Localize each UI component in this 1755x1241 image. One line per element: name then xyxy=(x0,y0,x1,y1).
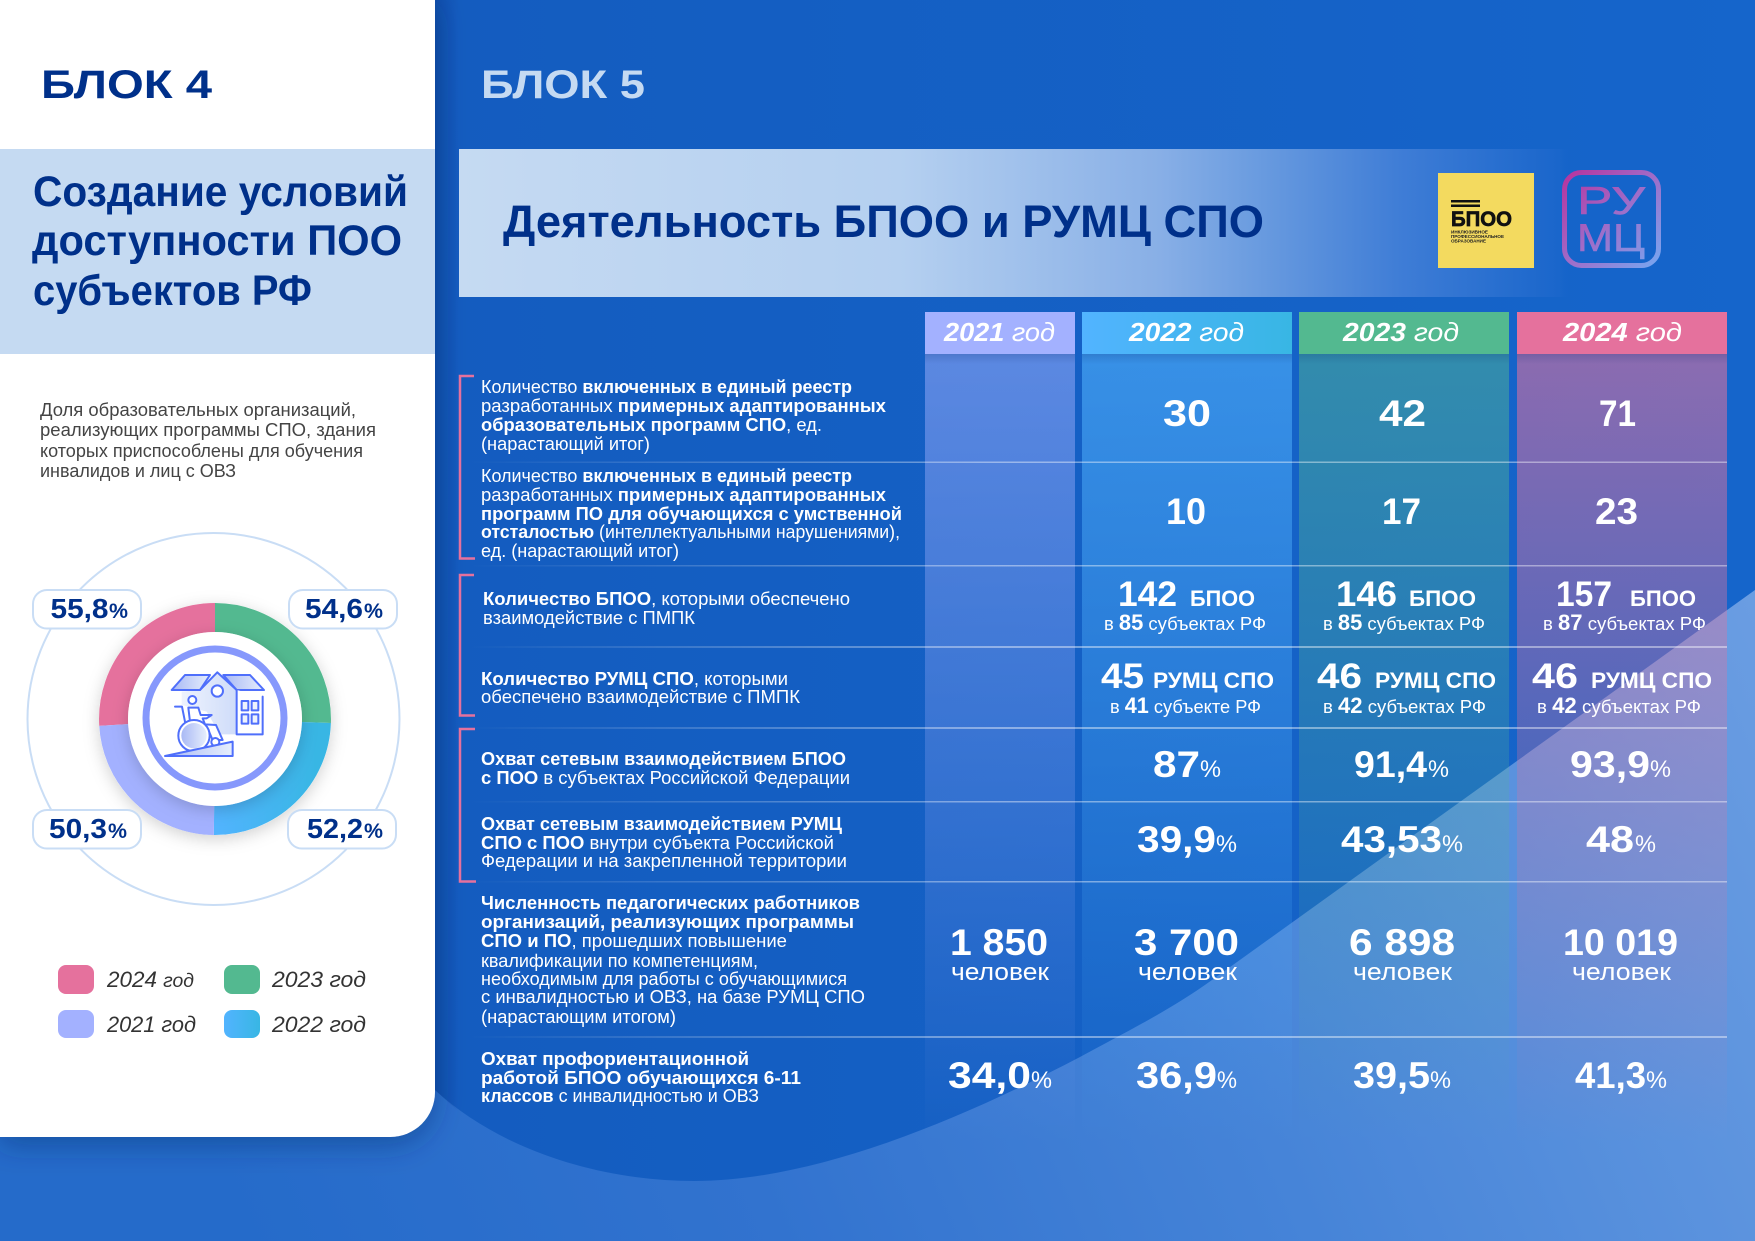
values: SPO programmes: 71 xyxy=(1599,393,1636,434)
values: БПОО count: в 85 субъектах РФ xyxy=(1323,610,1485,635)
legend: years: 2024 год xyxy=(106,967,194,992)
panel shadow on blue side xyxy=(435,0,459,1112)
values: БПОО count: БПОО xyxy=(1190,586,1255,611)
values: РУМЦ count: в 42 субъектах РФ xyxy=(1537,693,1701,718)
row label: career guidance coverage: работой БПОО обучающихся 6-11 xyxy=(481,1067,801,1088)
logo: БПОО: ОБРАЗОВАНИЕ xyxy=(1451,239,1486,244)
values: SPO programmes: 30 xyxy=(1163,393,1211,434)
column: 2021 xyxy=(925,312,1075,1144)
values: career guidance coverage: 39,5 xyxy=(1353,1055,1430,1096)
values: career guidance coverage: 41,3 xyxy=(1575,1055,1646,1096)
values: SPO programmes xyxy=(1163,393,1636,434)
values: trained teachers: 6 898 xyxy=(1349,922,1455,963)
callout: 2024 value: % xyxy=(109,600,128,623)
column: 2022 xyxy=(1082,312,1292,1144)
logo: РУМЦ: РУ xyxy=(1577,180,1645,223)
heading: block 4 title xyxy=(32,168,408,315)
row label: БПОО network coverage: с ПОО в субъектах Российской Федерации xyxy=(481,767,850,788)
values: trained teachers: человек xyxy=(1572,959,1672,986)
row label: career guidance coverage xyxy=(481,1048,801,1106)
values: БПОО network coverage: % xyxy=(1428,756,1449,783)
values: БПОО count: в 87 субъектах РФ xyxy=(1543,610,1706,635)
panel: block 4 white card xyxy=(0,0,435,1137)
row label: trained teachers: необходимым для работы с обучающимися xyxy=(481,968,847,989)
heading: block 4 title: субъектов РФ xyxy=(33,267,312,315)
values: РУМЦ network coverage: 48 xyxy=(1586,819,1634,860)
values: PO programmes xyxy=(1166,491,1638,532)
values: БПОО network coverage: 93,9 xyxy=(1570,744,1650,785)
callout: 2024 value: 55,8 xyxy=(50,593,108,624)
values: РУМЦ network coverage: % xyxy=(1635,831,1656,858)
row label: trained teachers: квалификации по компетенциям, xyxy=(481,950,758,971)
callout: 2023 value xyxy=(289,590,397,628)
values: БПОО count: в 85 субъектах РФ xyxy=(1104,610,1266,635)
values: PO programmes: 23 xyxy=(1595,491,1638,532)
values: trained teachers: 10 019 xyxy=(1563,922,1678,963)
callout: 2022 value: 52,2 xyxy=(307,813,363,844)
values: БПОО network coverage xyxy=(1153,744,1671,785)
chart: accessibility donut xyxy=(28,533,400,905)
brackets: row groups xyxy=(460,376,476,882)
values: РУМЦ network coverage: 43,53 xyxy=(1341,819,1442,860)
text block: chart description xyxy=(40,400,376,481)
callout: 2021 value: % xyxy=(108,820,127,843)
values: РУМЦ count: 45 xyxy=(1101,657,1144,696)
row label: career guidance coverage: Охват профориентационной xyxy=(481,1048,749,1069)
row label: adapted PO programmes xyxy=(481,465,902,561)
row label: РУМЦ count: обеспечено взаимодействие с ПМПК xyxy=(481,686,800,707)
values: РУМЦ network coverage: 39,9 xyxy=(1137,819,1216,860)
values: career guidance coverage: % xyxy=(1646,1067,1667,1094)
row label: РУМЦ count: Количество РУМЦ СПО, которыми xyxy=(481,668,788,689)
column: 2022: 2022 год xyxy=(1128,317,1244,347)
text block: chart description: которых приспособлены для обучения xyxy=(40,441,363,461)
values: БПОО network coverage: 91,4 xyxy=(1354,744,1427,785)
heading: БЛОК 4: БЛОК 4 xyxy=(41,63,213,107)
row label: adapted SPO programmes: разработанных примерных адаптированных xyxy=(481,395,887,416)
text block: chart description: инвалидов и лиц с ОВЗ xyxy=(40,461,236,481)
values: career guidance coverage: % xyxy=(1031,1067,1052,1094)
row label: trained teachers: с инвалидностью и ОВЗ, на базе РУМЦ СПО xyxy=(481,986,865,1007)
legend: years: 2021 год xyxy=(106,1012,196,1037)
row label: trained teachers: организаций, реализующих программы xyxy=(481,911,854,932)
row label: adapted SPO programmes: образовательных программ СПО, ед. xyxy=(481,414,822,435)
values: trained teachers: 1 850 xyxy=(950,922,1048,963)
values: SPO programmes: 42 xyxy=(1379,393,1426,434)
legend: years xyxy=(58,965,366,1038)
row label: БПОО count: Количество БПОО, которыми обеспечено xyxy=(483,588,850,609)
values: РУМЦ network coverage xyxy=(1137,819,1656,860)
values: РУМЦ count xyxy=(1101,657,1712,718)
values: PO programmes: 10 xyxy=(1166,491,1206,532)
column: 2024: 2024 год xyxy=(1562,317,1682,347)
values: БПОО network coverage: % xyxy=(1650,756,1671,783)
values: trained teachers: человек xyxy=(1353,959,1453,986)
icon: wheelchair user and house xyxy=(165,672,264,756)
heading: БЛОК 5: БЛОК 5 xyxy=(481,63,645,107)
text block: row labels xyxy=(481,376,902,1106)
row label: РУМЦ network coverage xyxy=(481,813,847,871)
row label: РУМЦ network coverage: Федерации и на закрепленной территории xyxy=(481,850,847,871)
row label: trained teachers xyxy=(481,892,865,1027)
values: БПОО count: БПОО xyxy=(1630,586,1696,611)
values: trained teachers: человек xyxy=(951,959,1050,986)
values: РУМЦ network coverage: % xyxy=(1442,831,1463,858)
values: БПОО network coverage: % xyxy=(1200,756,1221,783)
values: БПОО count: 157 xyxy=(1556,575,1612,614)
values: trained teachers: 3 700 xyxy=(1134,922,1239,963)
callout: 2021 value: 50,3 xyxy=(49,813,107,844)
callout: 2021 value xyxy=(33,810,141,848)
column: 2021: 2021 год xyxy=(943,317,1055,347)
logo: БПОО: БПОО xyxy=(1451,208,1512,231)
row label: adapted SPO programmes xyxy=(481,376,887,454)
row label: adapted PO programmes: разработанных примерных адаптированных xyxy=(481,484,887,505)
logo: РУМЦ: МЦ xyxy=(1577,217,1645,260)
column: 2024 xyxy=(1517,312,1727,1144)
legend: years: 2023 год xyxy=(271,967,366,992)
values: career guidance coverage: % xyxy=(1217,1067,1237,1094)
logo: РУМЦ xyxy=(1564,172,1658,266)
logo: БПОО xyxy=(1438,173,1534,268)
values: БПОО count: 146 xyxy=(1336,575,1397,614)
row label: БПОО count: взаимодействие с ПМПК xyxy=(483,607,695,628)
heading: block 4 title: доступности ПОО xyxy=(32,217,402,265)
values: РУМЦ count: РУМЦ СПО xyxy=(1591,668,1712,693)
row label: trained teachers: Численность педагогических работников xyxy=(481,892,860,913)
row label: РУМЦ network coverage: СПО с ПОО внутри субъекта Российской xyxy=(481,832,834,853)
logo: БПОО: ПРОФЕССИОНАЛЬНОЕ xyxy=(1451,234,1504,239)
panel: block 5 title band xyxy=(459,149,1658,297)
values: PO programmes: 17 xyxy=(1382,491,1421,532)
values: РУМЦ count: РУМЦ СПО xyxy=(1153,668,1274,693)
row label: БПОО network coverage: Охват сетевым взаимодействием БПОО xyxy=(481,748,846,769)
text block: chart description: Доля образовательных организаций, xyxy=(40,400,356,420)
values: trained teachers: человек xyxy=(1138,959,1238,986)
column: 2023 xyxy=(1299,312,1509,1144)
values: РУМЦ count: 46 xyxy=(1317,657,1362,696)
row label: adapted PO programmes: Количество включенных в единый реестр xyxy=(481,465,852,486)
column: 2023: 2023 год xyxy=(1342,317,1459,347)
row label: adapted PO programmes: ед. (нарастающий итог) xyxy=(481,540,679,561)
row label: trained teachers: (нарастающим итогом) xyxy=(481,1006,676,1027)
logo: БПОО: ИНКЛЮЗИВНОЕ xyxy=(1451,229,1488,234)
text block: chart description: реализующих программы СПО, здания xyxy=(40,420,376,440)
heading: block 5 title: Деятельность БПОО и РУМЦ СПО xyxy=(503,196,1264,247)
callout: 2023 value: % xyxy=(364,600,383,623)
table values xyxy=(948,393,1712,1096)
values: РУМЦ count: в 41 субъекте РФ xyxy=(1110,693,1261,718)
row label: БПОО count xyxy=(483,588,850,628)
background: light wave xyxy=(0,590,1755,1241)
legend: years: 2022 год xyxy=(271,1012,366,1037)
row label: career guidance coverage: классов с инвалидностью и ОВЗ xyxy=(481,1085,759,1106)
callout: 2022 value: % xyxy=(364,820,383,843)
heading: block 4 title: Создание условий xyxy=(33,168,408,216)
row label: РУМЦ count xyxy=(481,668,800,707)
values: career guidance coverage xyxy=(948,1055,1667,1096)
values: РУМЦ count: в 42 субъектах РФ xyxy=(1323,693,1486,718)
values: РУМЦ network coverage: % xyxy=(1216,831,1237,858)
row label: adapted PO programmes: программ ПО для обучающихся с умственной xyxy=(481,503,902,524)
callout: 2022 value xyxy=(288,810,396,848)
row label: adapted SPO programmes: Количество включенных в единый реестр xyxy=(481,376,852,397)
row label: adapted SPO programmes: (нарастающий итог) xyxy=(481,433,650,454)
values: career guidance coverage: % xyxy=(1430,1067,1451,1094)
row label: adapted PO programmes: отсталостью (интеллектуальными нарушениями), xyxy=(481,521,900,542)
values: БПОО count: 142 xyxy=(1118,575,1177,614)
values: career guidance coverage: 36,9 xyxy=(1136,1055,1217,1096)
values: БПОО count: БПОО xyxy=(1409,586,1476,611)
callout: 2024 value xyxy=(33,590,141,628)
values: БПОО network coverage: 87 xyxy=(1153,744,1200,785)
callout: 2023 value: 54,6 xyxy=(305,593,363,624)
row label: БПОО network coverage xyxy=(481,748,850,788)
panel: block 4 title band xyxy=(0,149,435,354)
values: РУМЦ count: РУМЦ СПО xyxy=(1375,668,1496,693)
values: career guidance coverage: 34,0 xyxy=(948,1055,1031,1096)
row label: trained teachers: СПО и ПО, прошедших повышение xyxy=(481,930,787,951)
row label: РУМЦ network coverage: Охват сетевым взаимодействием РУМЦ xyxy=(481,813,842,834)
values: БПОО count xyxy=(1104,575,1706,635)
values: trained teachers xyxy=(950,922,1678,986)
values: РУМЦ count: 46 xyxy=(1532,657,1578,696)
